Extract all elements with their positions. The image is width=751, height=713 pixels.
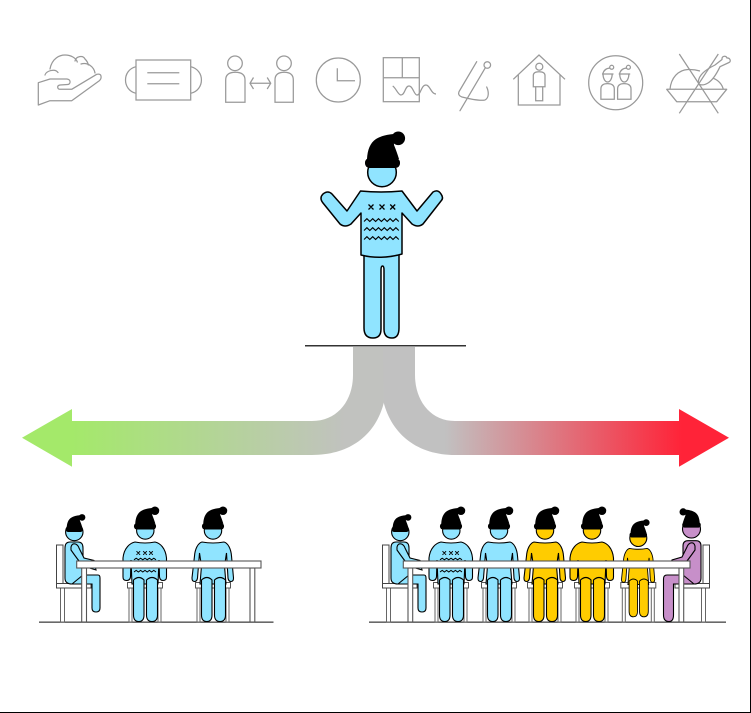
icon: crossed out roast dinner xyxy=(667,54,730,113)
seated person: sweater xyxy=(429,506,472,622)
icon: washing hands xyxy=(38,55,101,105)
figure: person in sweater and hat xyxy=(321,132,442,338)
icon: face mask xyxy=(126,60,201,100)
seated person: yellow guest xyxy=(524,506,566,622)
scene: large gathering xyxy=(369,506,726,623)
icon: physical distancing xyxy=(226,56,293,102)
seated person: plain xyxy=(478,506,520,622)
table xyxy=(77,561,261,622)
scene: small gathering xyxy=(39,506,274,623)
icon: two people with hats in a circle xyxy=(589,56,643,110)
diverging arrow xyxy=(22,347,729,467)
seated person: plain xyxy=(192,506,234,622)
seated person: purple guest xyxy=(664,508,710,622)
table xyxy=(403,561,690,622)
seated person: left side view xyxy=(382,514,426,622)
icon: house with person xyxy=(513,55,565,105)
icon: clock xyxy=(316,58,360,102)
platform line xyxy=(305,345,466,346)
icon: needle and thread xyxy=(459,62,491,111)
seated person: sweater xyxy=(123,506,166,622)
seated person: yellow guest wide xyxy=(570,506,614,622)
seated person: left side view xyxy=(56,514,100,622)
seated person: yellow child xyxy=(621,519,656,622)
icon: open window with air xyxy=(383,58,436,102)
